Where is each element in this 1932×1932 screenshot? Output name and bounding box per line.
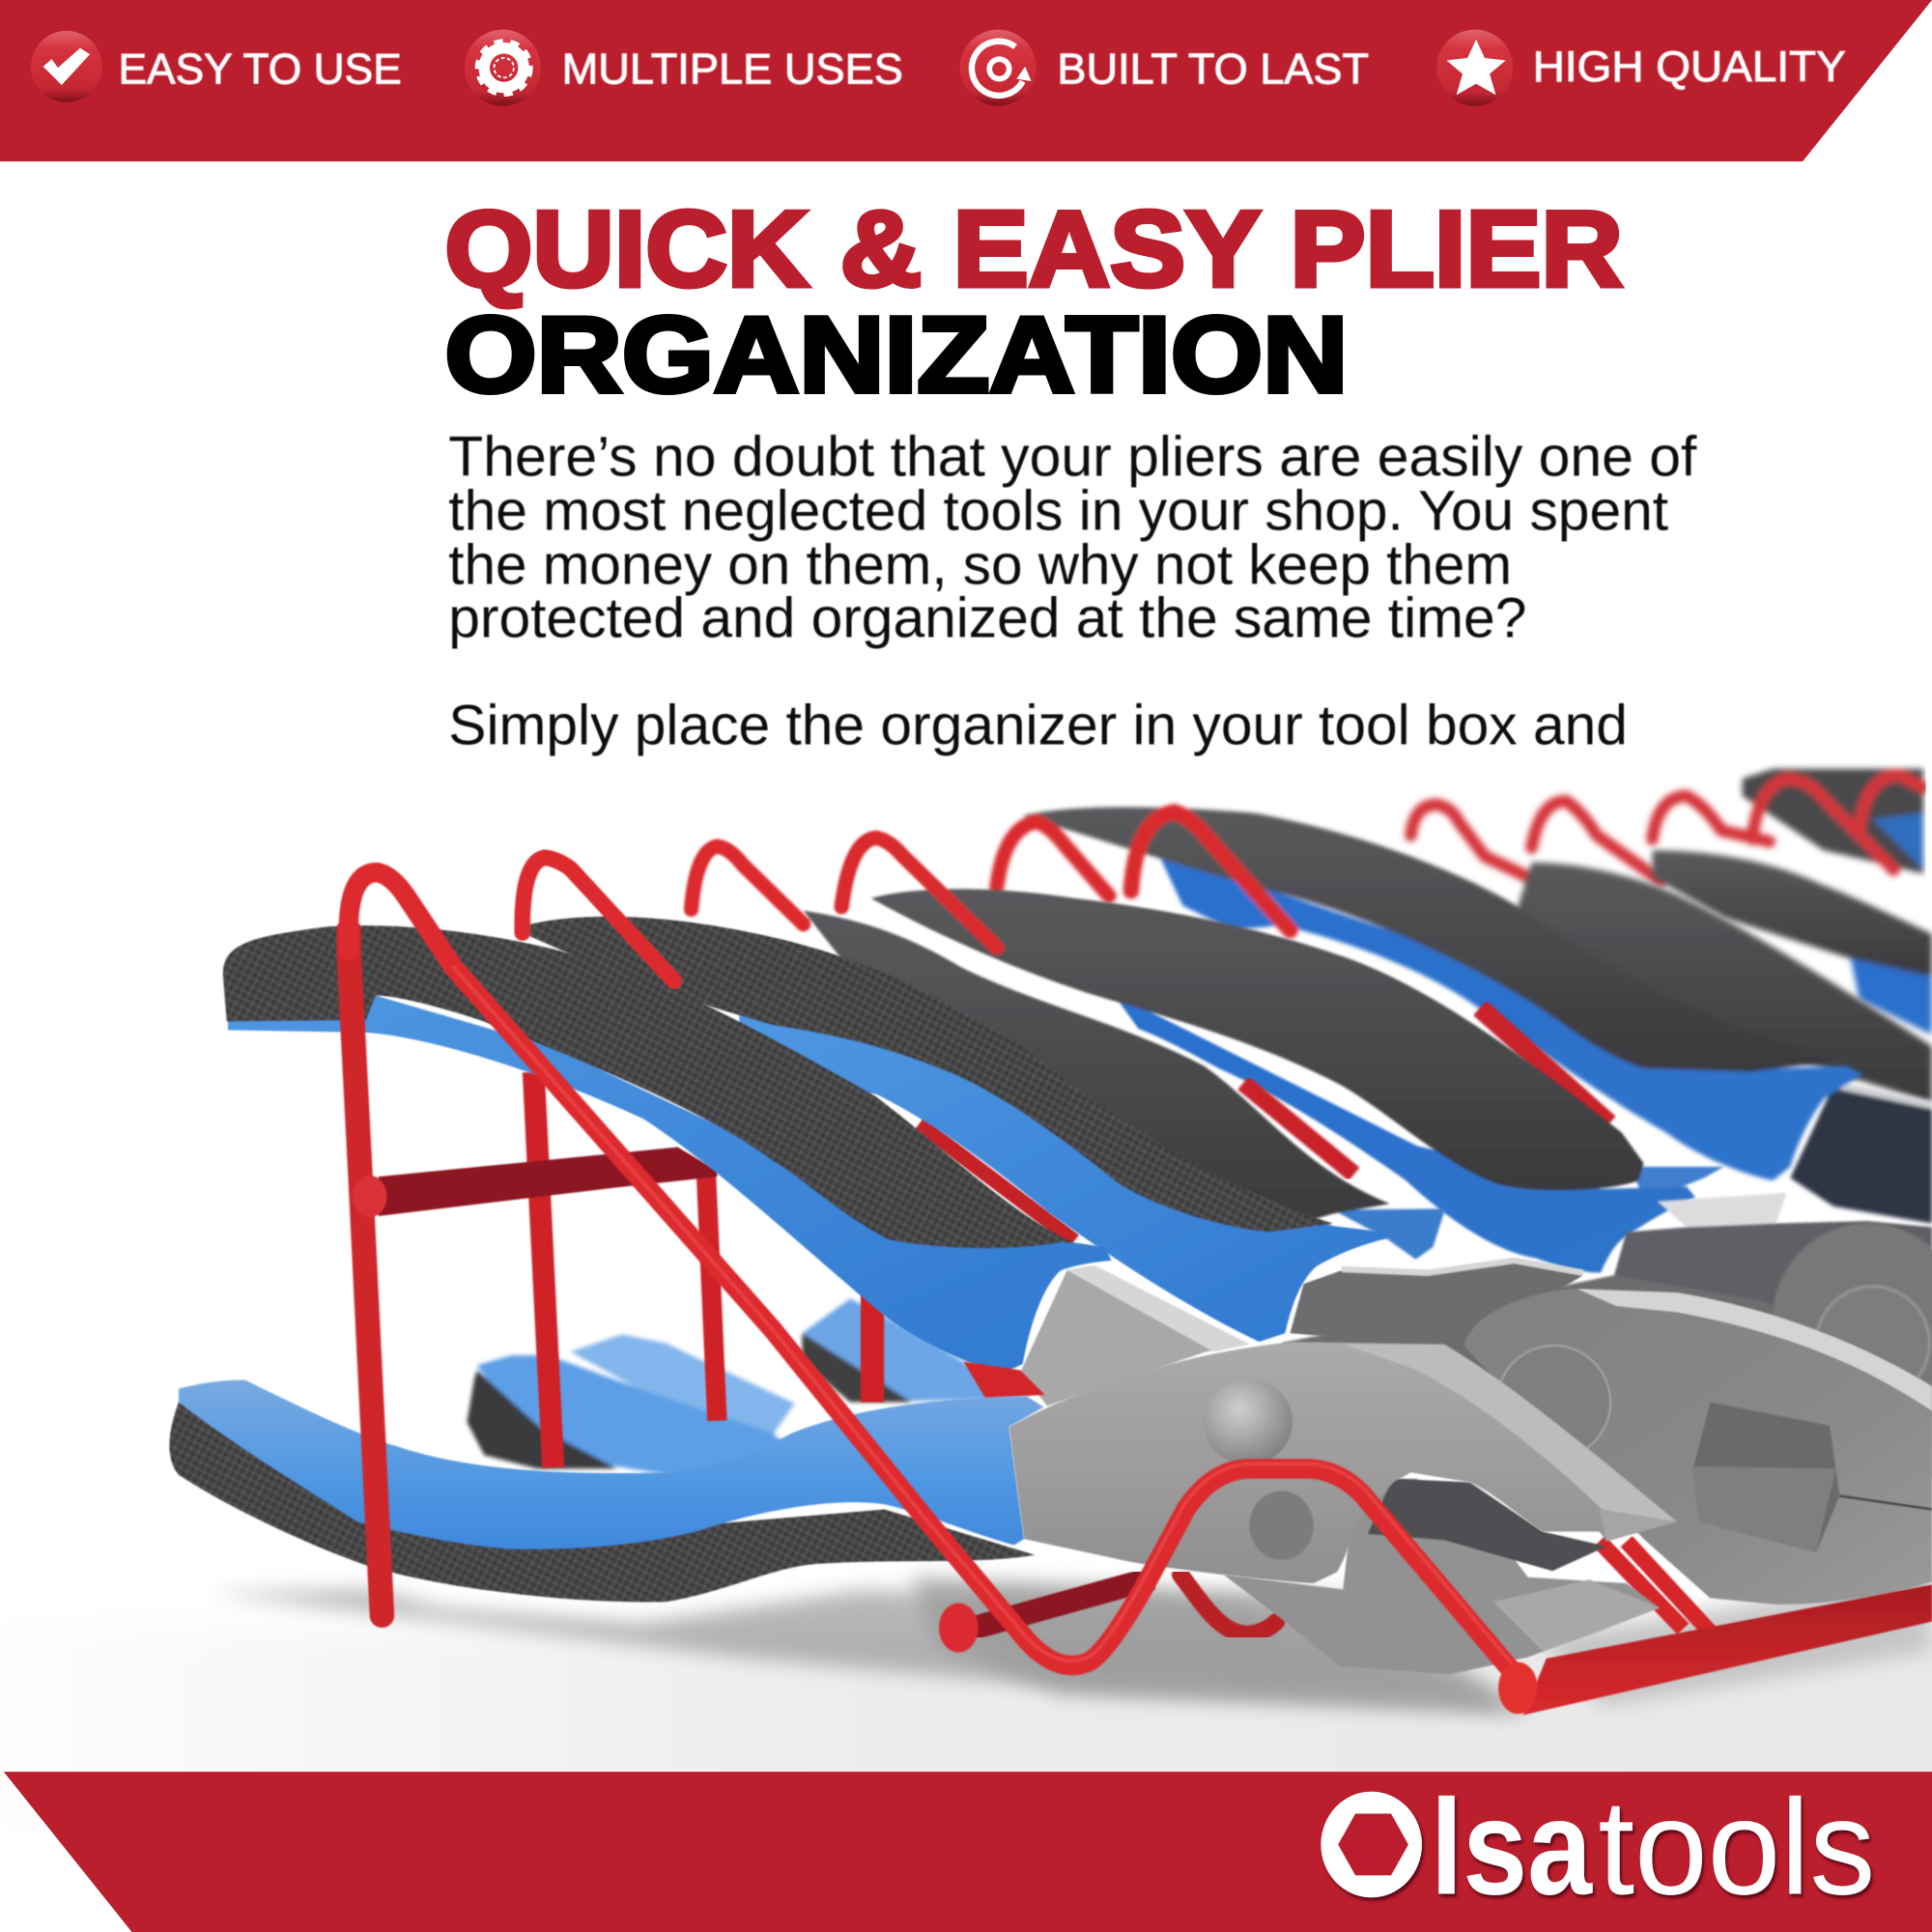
- bottom banner: [4, 1771, 1932, 1932]
- feature: built to last: [960, 30, 1369, 106]
- plier 3: [692, 846, 1445, 1260]
- plier 5: [997, 807, 1932, 1224]
- logo: Olsatools: [1321, 1771, 1875, 1924]
- front plier upper jaw: [1009, 1342, 1677, 1583]
- logo: Olsatools: tools: [1598, 1771, 1875, 1922]
- wire end caps: [353, 1176, 1538, 1714]
- body text: the money on them, so why not keep them: [448, 534, 1512, 597]
- plier 2 handle: [514, 858, 1387, 1342]
- red gap below grip: [963, 1361, 1045, 1399]
- icon: star: [1436, 30, 1513, 106]
- floor: [0, 1627, 1932, 1824]
- label: multiple uses: MULTIPLE USES: [562, 46, 903, 94]
- title line 1: QUICK & EASY PLIER: [444, 189, 1623, 309]
- red wire seen between handles, rear: [1480, 1008, 1609, 1123]
- body text: There’s no doubt that your pliers are easily one of: [448, 425, 1697, 488]
- floor shadows: [210, 1571, 1932, 1716]
- far handles and wires: [1410, 769, 1923, 881]
- label: easy to use: EASY TO USE: [118, 46, 402, 94]
- title: [444, 189, 1623, 415]
- rear lower handles: [467, 1298, 1010, 1479]
- logo: Olsatools: lsa: [1431, 1771, 1593, 1922]
- label: high quality: HIGH QUALITY: [1533, 43, 1846, 91]
- label: built to last: BUILT TO LAST: [1057, 46, 1369, 94]
- logo: Olsatools: O: [1321, 1773, 1422, 1924]
- white right edge of the photo: [1926, 739, 1932, 918]
- title line 2: ORGANIZATION: [444, 296, 1348, 415]
- body text: protected and organized at the same time?: [448, 586, 1526, 649]
- red wire seen between handles, middle: [1243, 1083, 1354, 1175]
- feature: easy to use: [31, 31, 402, 102]
- bottom rear bar: [1523, 1584, 1932, 1716]
- red wire seen between handles, front: [920, 1123, 1074, 1240]
- top banner: [0, 0, 1932, 161]
- plier 7: [1652, 850, 1932, 1035]
- plier 1 upper handle: [223, 925, 1249, 1406]
- body text: [448, 425, 1697, 756]
- plier 4 steel: [1282, 1193, 1932, 1479]
- rear wire uprights and cross bar: [379, 1072, 872, 1467]
- body text: Simply place the organizer in your tool box and: [448, 694, 1628, 756]
- plier 1 lower handle: [169, 1380, 1043, 1602]
- front plier lower jaw: [1224, 1479, 1660, 1674]
- rear wire bar and curved wire: [961, 1575, 1276, 1634]
- front red wire frame: [349, 872, 1518, 1678]
- body text: the most neglected tools in your shop. You spent: [448, 479, 1668, 542]
- feature: high quality: [1436, 30, 1846, 106]
- plier 2 steel: [1290, 1261, 1932, 1605]
- icon: gear: [465, 30, 541, 106]
- icon: check mark: [31, 31, 102, 102]
- double rear wires: [1600, 1542, 1717, 1638]
- icon: gear in circular arrow: [960, 30, 1037, 106]
- plier 6: [1515, 863, 1932, 1103]
- photo: pliers in red wire organizer: [0, 739, 1932, 1824]
- feature: multiple uses: [465, 30, 903, 106]
- plier 4: [841, 838, 1723, 1273]
